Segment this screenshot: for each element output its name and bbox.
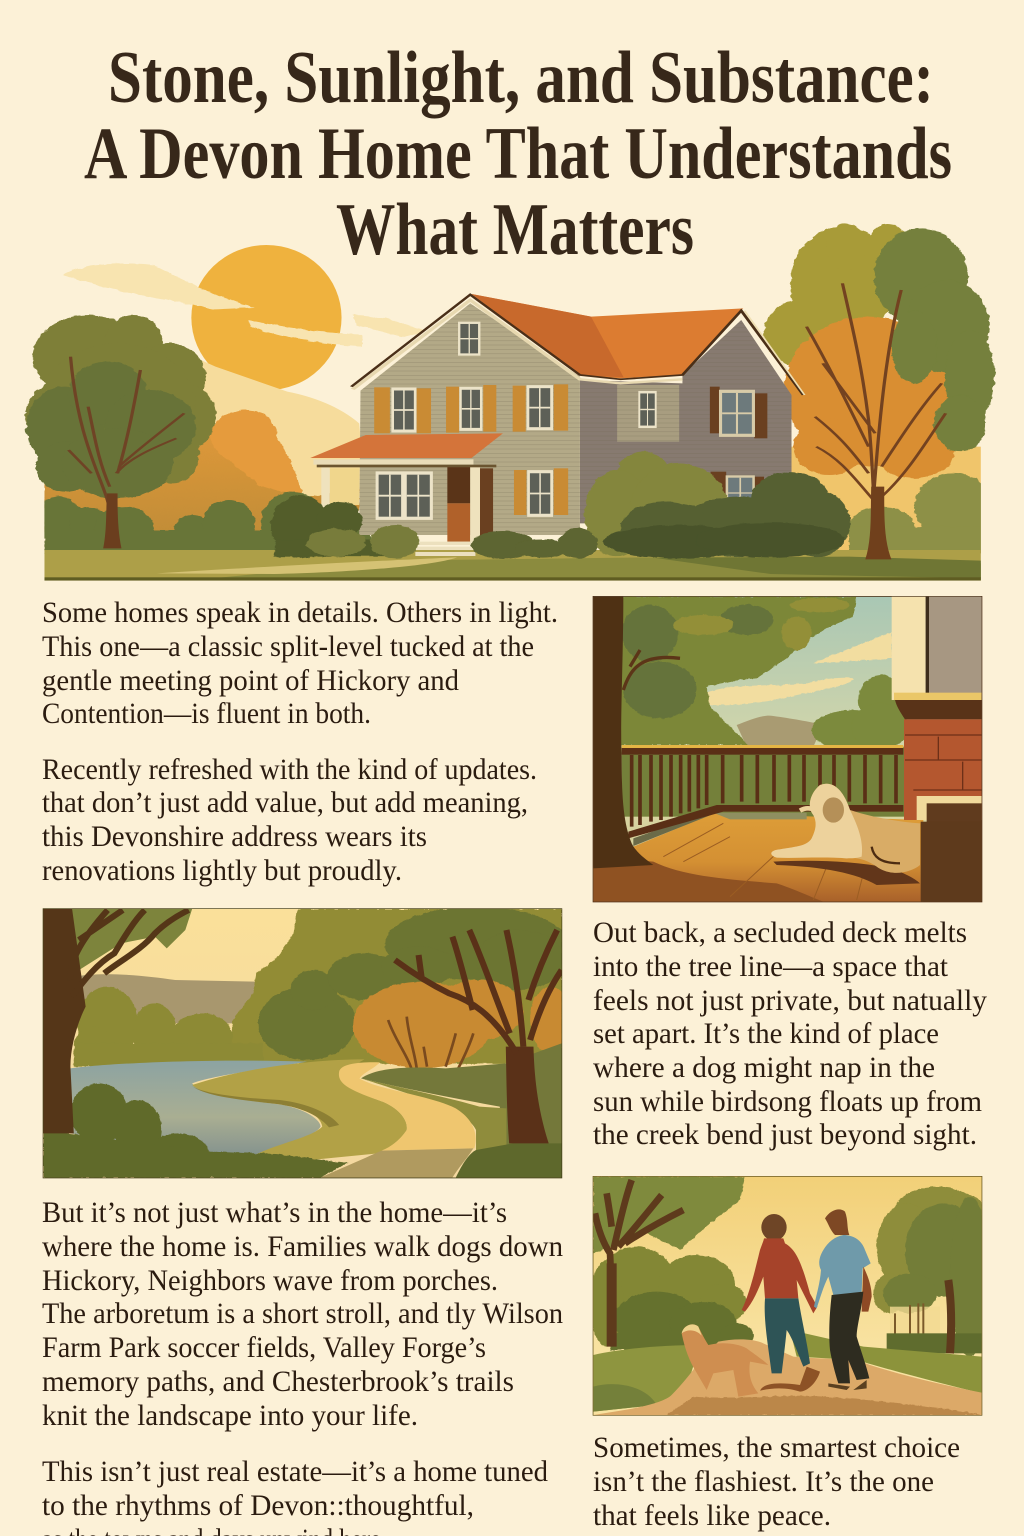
dog [771,784,920,885]
front wall [359,303,580,535]
far woods [229,909,562,1063]
clouds [700,678,853,705]
right tree [395,930,562,1143]
winding path [339,1062,476,1151]
man [814,1209,872,1390]
text: deck paragraph: into the tree line—a space that [593,951,949,983]
green treeline [35,492,371,553]
text: opening paragraph: Some homes speak in details. Others in light. [42,597,558,629]
deck floor [593,813,923,902]
text: renovations paragraph: this Devonshire address wears its [42,821,427,853]
house corner [892,597,982,902]
porch roof [310,433,503,458]
porch interior, door, columns [330,468,359,505]
roof eaves [353,300,682,389]
orange bush [353,980,571,1068]
title [84,37,952,271]
distant hill [736,716,816,745]
left tree [43,909,192,1133]
text: deck paragraph: feels not just private, but natually [593,985,987,1017]
sun [191,245,342,390]
text: closing right paragraph: isn’t the flashiest. It’s the one [593,1466,934,1498]
clouds [62,263,426,347]
illustration: back deck with dog [593,596,982,902]
text: neighborhood paragraph: But it’s not just what’s in the home—it’s [42,1197,507,1229]
left tree canopy [593,1177,745,1253]
text: neighborhood paragraph: The arboretum is a short stroll, and tly Wilson [42,1298,563,1330]
title: What Matters [336,189,694,271]
text: opening paragraph [42,597,558,730]
illustration: couple walking dog [590,1176,990,1416]
text: neighborhood paragraph: where the home is. Families walk dogs down [42,1231,563,1263]
text: neighborhood paragraph: knit the landscape into your life. [42,1400,418,1432]
green backdrop below rail [622,747,905,817]
roof [472,294,743,378]
trunk [593,597,653,868]
steps [415,542,475,556]
text: renovations paragraph [42,754,537,887]
house [310,294,805,556]
right grass [361,1043,562,1147]
railing [622,745,903,838]
text: deck paragraph: sun while birdsong floats up from [593,1086,982,1118]
water [70,1061,321,1155]
text: closing right paragraph [593,1432,960,1532]
text: deck paragraph: Out back, a secluded deck melts [593,917,967,949]
illustration: house at sunset [25,223,995,581]
trees [812,675,908,750]
text: deck paragraph: where a dog might nap in the [593,1052,935,1084]
text: opening paragraph: Contention—is fluent in both. [42,698,371,730]
text: neighborhood paragraph [42,1197,563,1432]
text: neighborhood paragraph: memory paths, and Chesterbrook’s trails [42,1366,514,1398]
lawn [593,1345,700,1412]
text: neighborhood paragraph: Farm Park soccer fields, Valley Forge’s [42,1332,486,1364]
text: renovations paragraph: renovations lightly but proudly. [42,855,402,887]
text: deck paragraph [593,917,987,1151]
text: neighborhood paragraph: Hickory, Neighbors wave from porches. [42,1265,498,1297]
text: renovations paragraph: that don’t just add value, but add meaning, [42,787,528,819]
text: opening paragraph: gentle meeting point of Hickory and [42,665,459,697]
shrubs [271,452,850,559]
text: closing left paragraph: to the rhythms of Devon::thoughtful, [42,1490,474,1522]
text: closing left paragraph: This isn’t just real estate—it’s a home tuned [42,1456,548,1488]
tree canopy [620,597,857,745]
river bank [192,1059,407,1163]
text: closing left paragraph [42,1456,548,1536]
woman [742,1214,820,1392]
text: deck paragraph: set apart. It’s the kind of place [593,1018,939,1050]
sky glow and background hills [35,353,993,581]
text: closing right paragraph: Sometimes, the smartest choice [593,1432,960,1464]
text: opening paragraph: This one—a classic split-level tucked at the [42,631,534,663]
dog [682,1324,768,1397]
windows [458,322,480,356]
right tree [764,223,995,559]
text: closing right paragraph: that feels like peace. [593,1500,831,1532]
background trees [590,1247,747,1347]
dark shrubs [43,1083,348,1178]
wing wall [580,320,792,523]
lawn [44,550,981,581]
orange treeline [44,410,359,550]
tree trunks [593,1178,685,1264]
shutters [374,384,568,515]
path [593,1339,982,1415]
left tree [25,315,216,548]
text: deck paragraph: the creek bend just beyond sight. [593,1119,977,1151]
text: renovations paragraph: Recently refreshed with the kind of updates. [42,754,537,786]
illustration: creek and path [43,907,571,1178]
